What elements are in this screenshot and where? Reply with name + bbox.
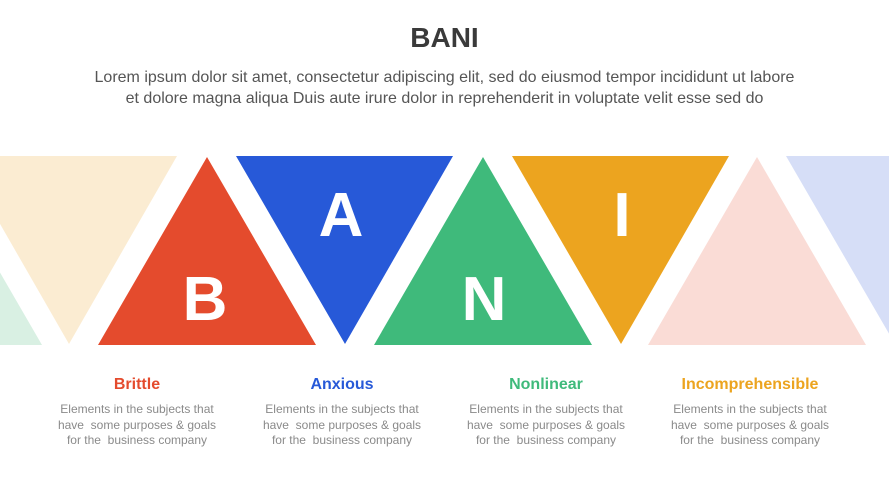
triangle A: A	[319, 181, 363, 250]
subtitle	[95, 69, 794, 107]
item: Anxious: Anxious	[310, 376, 374, 393]
item: Nonlinear: Elements in the subjects that have some purposes & goals for the business company	[467, 402, 625, 447]
subtitle: et dolore magna aliqua Duis aute irure dolor in reprehenderit in voluptate velit esse sed do	[126, 90, 763, 107]
item: Nonlinear	[467, 376, 625, 447]
item: Brittle: Elements in the subjects that have some purposes & goals for the business company	[58, 402, 216, 447]
item: Incomprehensible: Incomprehensible	[682, 376, 818, 393]
triangle B	[98, 157, 316, 345]
triangle I	[512, 156, 729, 344]
triangle I: I	[613, 181, 631, 250]
triangle N: N	[462, 265, 506, 334]
item: Anxious	[263, 376, 421, 447]
item: Nonlinear: Nonlinear	[509, 376, 583, 393]
title: BANI	[410, 22, 479, 53]
item: Brittle: Brittle	[114, 376, 160, 393]
item: Brittle	[58, 376, 216, 447]
triangle A	[236, 156, 453, 344]
item: Incomprehensible: Elements in the subjects that have some purposes & goals for the business company	[671, 402, 829, 447]
item: Anxious: Elements in the subjects that have some purposes & goals for the business company	[263, 402, 421, 447]
item: Incomprehensible	[671, 376, 829, 447]
triangle N	[374, 157, 592, 345]
triangle B: B	[183, 265, 227, 334]
subtitle: Lorem ipsum dolor sit amet, consectetur adipiscing elit, sed do eiusmod tempor incididunt ut labore	[95, 69, 794, 86]
